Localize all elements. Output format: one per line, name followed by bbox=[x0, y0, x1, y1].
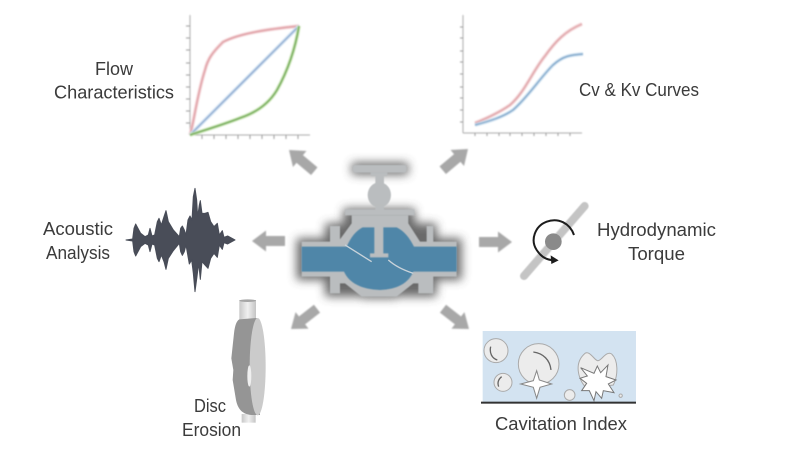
icon: hydrodynamic torque bbox=[524, 206, 585, 276]
heading: hydrodynamic torque bbox=[597, 220, 716, 264]
arrow: to hydrodynamic torque bbox=[479, 232, 512, 252]
heading: flow characteristics: Flow bbox=[95, 59, 134, 79]
bubbles bbox=[484, 339, 622, 400]
heading: disc erosion: Erosion bbox=[182, 420, 241, 440]
collapse sparks bbox=[521, 371, 552, 398]
icon: disc erosion bbox=[231, 299, 266, 423]
chart: Cv and Kv curves bbox=[460, 15, 583, 136]
heading: cavitation index: Cavitation Index bbox=[495, 414, 627, 434]
heading: disc erosion: Disc bbox=[194, 396, 226, 416]
heading: acoustic analysis: Acoustic bbox=[43, 219, 113, 239]
heading: hydrodynamic torque: Torque bbox=[628, 244, 685, 264]
bubble highlights bbox=[490, 347, 551, 387]
chart: flow characteristics bbox=[186, 15, 310, 139]
arrow: to flow characteristics bbox=[282, 142, 321, 179]
heading: acoustic analysis: Analysis bbox=[46, 243, 110, 263]
arrow: to cavitation index bbox=[437, 300, 475, 337]
heading: acoustic analysis bbox=[43, 219, 113, 263]
solid surface line bbox=[481, 402, 636, 404]
icon: central valve bbox=[297, 163, 462, 298]
heading: flow characteristics: Characteristics bbox=[54, 82, 174, 102]
valve water bbox=[302, 227, 457, 290]
icon: cavitation bbox=[481, 331, 636, 404]
heading: disc erosion bbox=[182, 396, 241, 440]
icon: acoustic waveform bbox=[126, 188, 235, 292]
heading: hydrodynamic torque: Hydrodynamic bbox=[597, 220, 716, 240]
arrow: to disc erosion bbox=[285, 300, 323, 337]
valve shadow bbox=[297, 163, 462, 298]
arrow: to Cv and Kv curves bbox=[436, 141, 475, 178]
valve seat bbox=[345, 245, 413, 273]
heading: flow characteristics bbox=[54, 59, 174, 102]
arrow: to acoustic analysis bbox=[252, 230, 285, 252]
water background bbox=[483, 331, 636, 402]
heading: Cv and Kv curves: Cv & Kv Curves bbox=[579, 80, 699, 100]
valve body bbox=[302, 165, 457, 297]
